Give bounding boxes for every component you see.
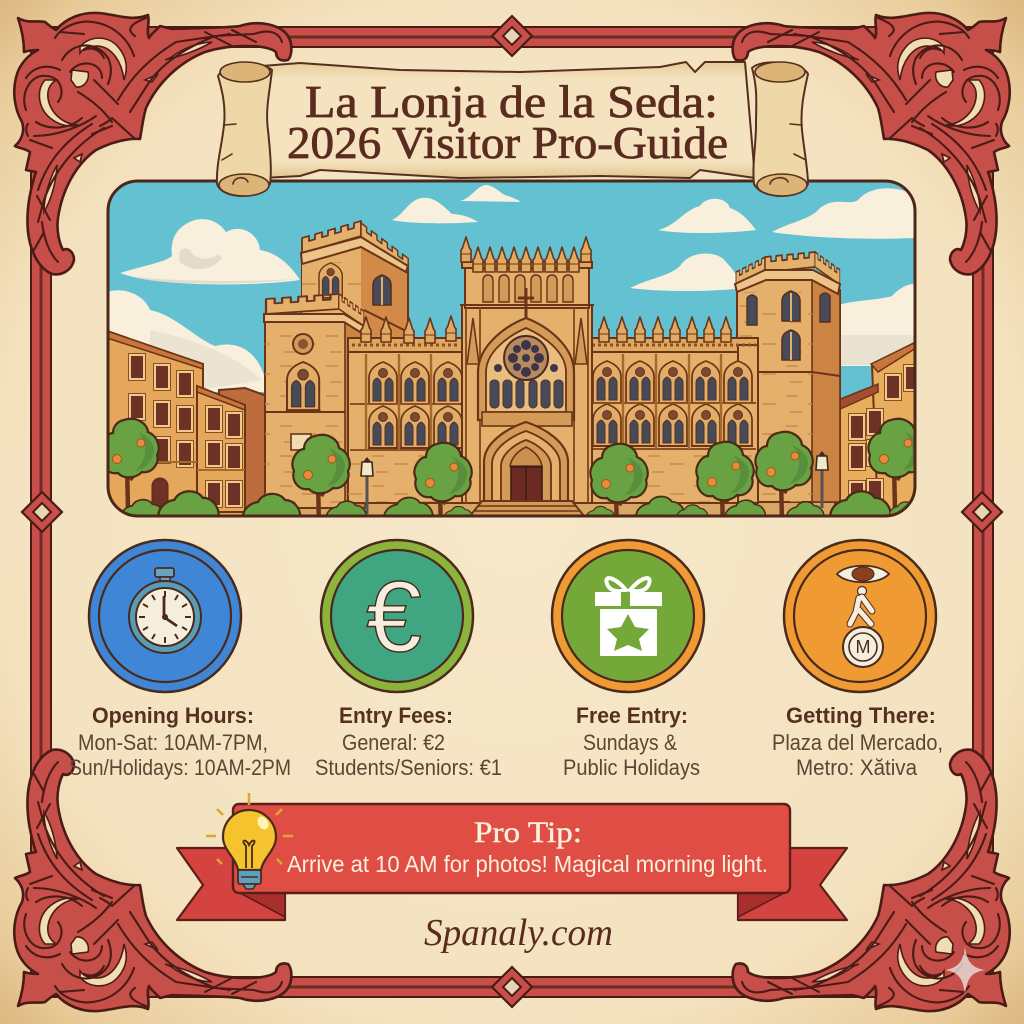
hedges (122, 490, 909, 514)
diamond left (22, 492, 62, 532)
right scroll roll (752, 62, 808, 196)
right wing (590, 317, 758, 503)
corner top-left (14, 13, 291, 274)
icon: euro badge (321, 540, 473, 692)
text block: free entry: Free Entry: (576, 703, 688, 728)
text block: opening hours: Mon-Sat: 10AM-7PM, (78, 730, 268, 755)
back-left tower (301, 221, 408, 345)
right tower (735, 252, 840, 502)
title line 1: La Lonja de la Seda: (305, 77, 718, 127)
front-left tower (264, 294, 365, 508)
corner top-right (733, 13, 1010, 274)
right townhouses (834, 342, 914, 509)
ribbon folds (240, 893, 784, 917)
text block: getting there: Plaza del Mercado, (772, 730, 943, 755)
central facade (460, 237, 594, 516)
ribbon right tail (738, 848, 847, 920)
text block: free entry (563, 703, 700, 780)
text block: opening hours (69, 703, 291, 780)
diamond bottom (492, 967, 532, 1007)
text block: free entry: Public Holidays (563, 755, 700, 780)
text block: entry fees (315, 703, 502, 780)
text block: entry fees: General: €2 (342, 730, 445, 755)
icon: getting there badge (784, 540, 936, 692)
icon: euro badge: € (366, 561, 422, 673)
icon: light bulb (206, 793, 293, 889)
pro tip text: Arrive at 10 AM for photos! Magical morning light. (287, 851, 768, 877)
website credit: Spanaly.com (424, 912, 613, 954)
left townhouses (107, 331, 267, 512)
left scroll roll (217, 62, 272, 196)
left wing (348, 316, 463, 503)
diamond right (962, 492, 1002, 532)
text block: opening hours: Sun/Holidays: 10AM-2PM (69, 755, 291, 780)
street lamps (361, 451, 828, 514)
icon: getting there badge: M (856, 637, 870, 657)
corner bottom-left (14, 750, 291, 1011)
clouds (107, 185, 916, 392)
ribbon main band (233, 804, 790, 893)
diamond top (492, 16, 532, 56)
text block: entry fees: Entry Fees: (339, 703, 453, 728)
text block: getting there (772, 703, 943, 780)
corner bottom-right (733, 750, 1010, 1011)
text block: entry fees: Students/Seniors: €1 (315, 755, 502, 780)
text block: getting there: Metro: Xătiva (796, 755, 918, 780)
watermark sparkle (945, 947, 985, 994)
icon: gift badge (552, 540, 704, 692)
pro tip ribbon (177, 804, 847, 920)
orange trees (110, 418, 914, 514)
title scroll banner (217, 62, 808, 196)
title line 2: 2026 Visitor Pro-Guide (287, 118, 728, 168)
ribbon left tail (177, 848, 285, 920)
text block: opening hours: Opening Hours: (92, 703, 254, 728)
ground (220, 503, 834, 514)
icon: stopwatch badge (89, 540, 241, 692)
pro tip heading: Pro Tip: (474, 816, 582, 849)
illustration panel: La Lonja (101, 180, 926, 535)
text block: getting there: Getting There: (786, 703, 936, 728)
text block: free entry: Sundays & (583, 730, 677, 755)
